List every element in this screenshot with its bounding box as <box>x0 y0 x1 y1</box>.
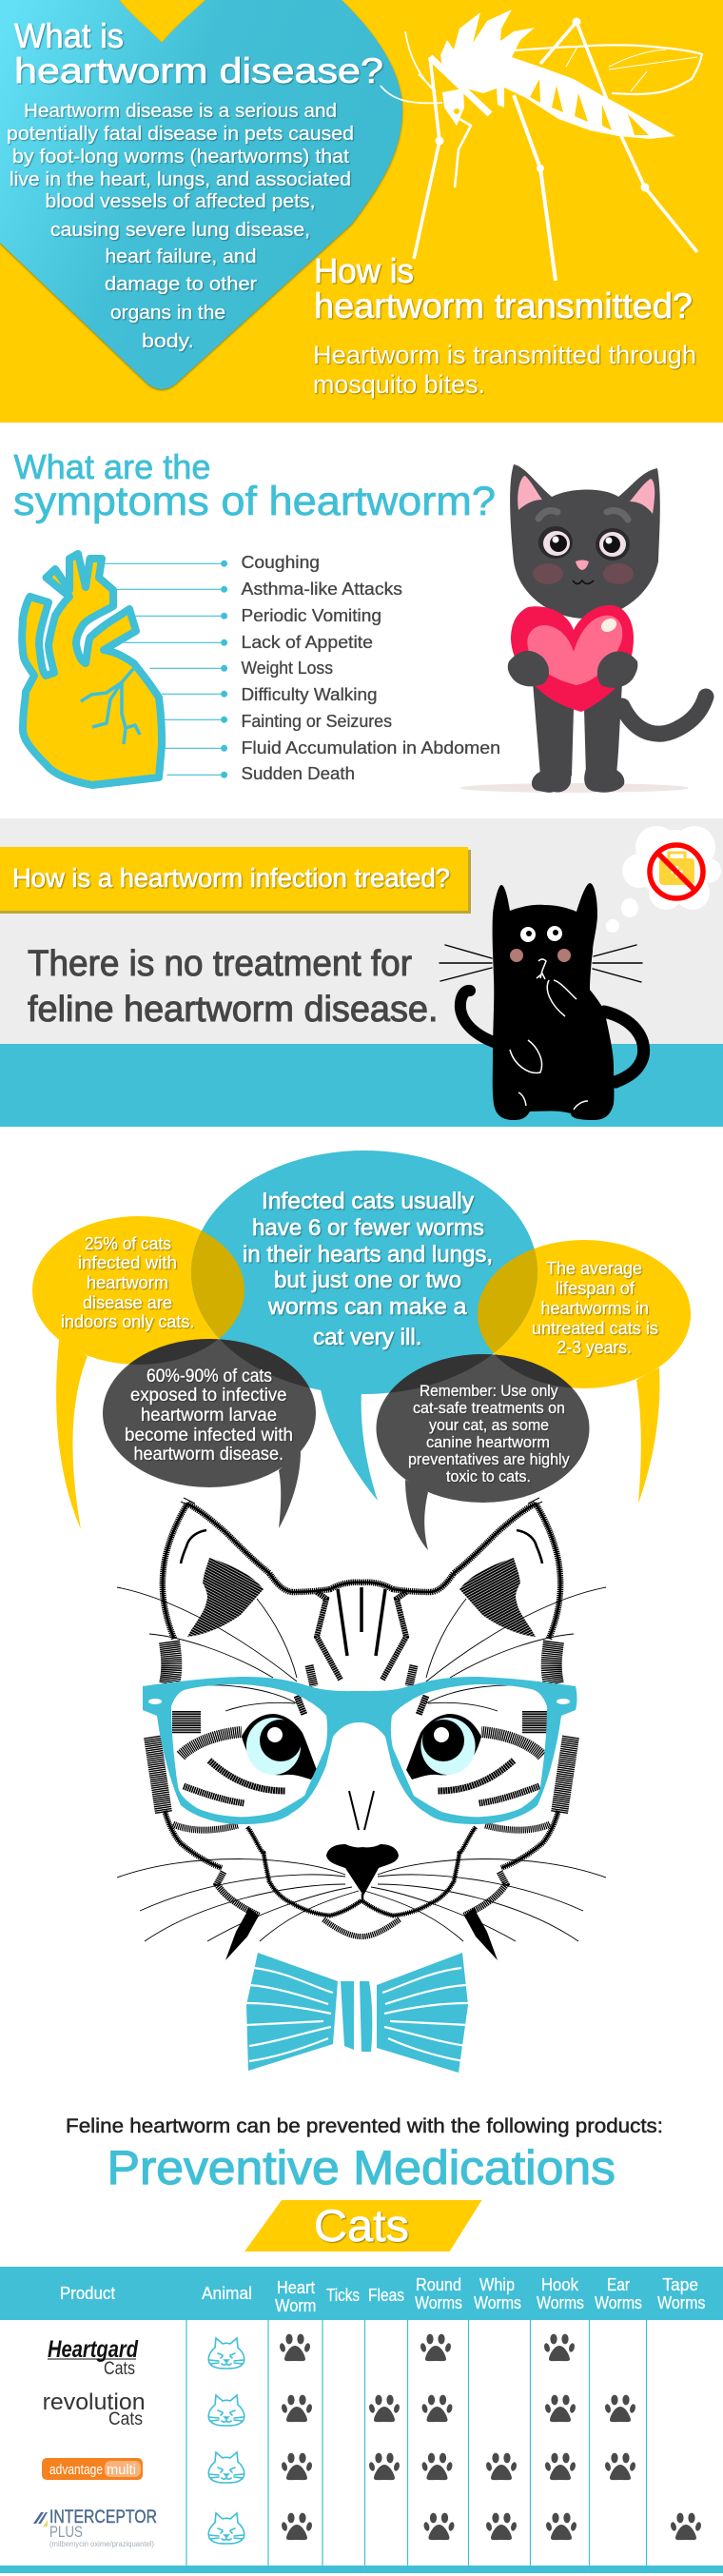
cat eye right <box>406 1714 481 1780</box>
logo: revolution <box>43 2389 146 2429</box>
logo: revolution: revolution <box>43 2389 146 2415</box>
list: symptoms with leader lines: Sudden Death <box>242 763 355 783</box>
table header labels: Whip <box>479 2274 515 2294</box>
text: transmission: mosquito bites. <box>313 370 485 399</box>
text: cyan bubble: worms can make a <box>267 1294 467 1320</box>
bubble: yellow left <box>32 1216 244 1529</box>
text: yellow left bubble: 25% of cats <box>85 1233 171 1253</box>
heading: symptoms: symptoms of heartworm? <box>13 479 496 524</box>
text: yellow left bubble: heartworm <box>87 1272 168 1292</box>
glasses <box>143 1677 576 1824</box>
heading: how is heartworm transmitted: How is <box>314 251 414 290</box>
text: dark right bubble: cat-safe treatments on <box>413 1399 565 1417</box>
icon: mosquito <box>381 10 702 281</box>
text: yellow left bubble <box>61 1233 194 1331</box>
text: cyan bubble: in their hearts and lungs, <box>243 1242 493 1268</box>
text: definition: heart failure, and <box>105 246 257 267</box>
logo: interceptor plus: (milbemycin oxime/praziquantel) <box>49 2540 154 2548</box>
text: definition: live in the heart, lungs, and associated <box>10 168 351 190</box>
list: symptoms with leader lines: Asthma-like Attacks <box>242 579 402 599</box>
heart shape <box>0 0 402 389</box>
icons: animal column <box>208 2338 244 2544</box>
text: cyan bubble <box>243 1189 493 1350</box>
panel: preventive medications <box>0 2114 723 2573</box>
table header labels: Worms <box>415 2292 462 2312</box>
bubble: cyan center <box>191 1150 537 1501</box>
illustration: heart <box>22 554 162 785</box>
cat eye left <box>242 1714 317 1780</box>
table header labels: Worms <box>537 2292 584 2312</box>
logo: advantage multi <box>42 2458 143 2480</box>
panel: treatment <box>0 818 723 1127</box>
list: symptoms with leader lines: Weight Loss <box>242 658 333 678</box>
illustration: thought bubble with no-medicine sign <box>606 826 721 933</box>
table header labels <box>60 2274 706 2315</box>
illustration: black cat <box>440 883 644 1120</box>
text: definition: by foot-long worms (heartworms) that <box>12 146 349 167</box>
heading: symptoms: What are the <box>13 447 211 486</box>
text: definition: Heartworm disease is a serious and <box>24 100 337 122</box>
table header labels: Worms <box>474 2292 521 2312</box>
text: dark right bubble: preventatives are highly <box>408 1450 570 1468</box>
text: yellow right bubble: The average <box>546 1258 642 1278</box>
heading: how is heartworm transmitted: heartworm transmitted? <box>314 286 693 325</box>
text: definition: body. <box>142 330 194 352</box>
text: yellow left bubble: infected with <box>78 1252 177 1272</box>
bow tie <box>246 1953 468 2073</box>
table header labels: Tape <box>662 2274 698 2294</box>
text: no treatment <box>28 944 438 1030</box>
text: definition <box>7 100 354 352</box>
list: symptoms with leader lines: Coughing <box>242 552 320 572</box>
bubble: yellow right <box>478 1240 691 1504</box>
heading: symptoms <box>13 447 496 524</box>
text: yellow right bubble: untreated cats is <box>532 1318 658 1338</box>
text: dark right bubble: toxic to cats. <box>446 1467 531 1485</box>
table header labels: Ear <box>607 2274 630 2294</box>
list: symptoms with leader lines: Lack of Appetite <box>242 632 373 652</box>
panel: speech bubbles <box>32 1150 691 1550</box>
table header labels: Animal <box>202 2283 252 2303</box>
icons: paw row advantage multi <box>281 2453 636 2480</box>
heading: what is heartworm disease: What is <box>14 16 124 55</box>
heading: what is heartworm disease: heartworm disease? <box>14 51 383 90</box>
text: yellow right bubble: heartworms in <box>540 1298 649 1318</box>
heading: how is heartworm transmitted <box>314 251 693 325</box>
logo: heartgard: Cats <box>104 2359 135 2379</box>
label: cats: Cats <box>314 2200 409 2251</box>
table header labels: Ticks <box>326 2285 360 2305</box>
list: symptoms with leader lines: Fluid Accumulation in Abdomen <box>242 737 500 757</box>
logo: heartgard <box>48 2336 139 2379</box>
logo: heartgard: Heartgard <box>48 2336 139 2363</box>
table header labels: Heart <box>277 2277 315 2297</box>
list: symptoms with leader lines: Periodic Vomiting <box>242 605 381 625</box>
logo: revolution: Cats <box>108 2409 143 2429</box>
table header labels: Worm <box>275 2295 316 2315</box>
text: no treatment: There is no treatment for <box>28 944 412 984</box>
cat face line art <box>117 1498 606 1960</box>
logo: interceptor plus: PLUS <box>49 2523 83 2541</box>
text: definition: organs in the <box>110 302 225 324</box>
bubble: dark right <box>377 1354 590 1550</box>
illustration: gray cat holding heart <box>460 464 706 793</box>
bubble: dark left <box>103 1339 316 1528</box>
banner: how is a heartworm infection treated <box>0 847 471 914</box>
icons: paw row revolution <box>281 2395 636 2422</box>
illustration: cat with glasses and bow tie <box>117 1498 606 2073</box>
text: dark left bubble: heartworm larvae <box>141 1406 277 1426</box>
text: definition: blood vessels of affected pets, <box>46 190 316 212</box>
list: symptoms with leader lines: Fainting or Seizures <box>242 711 392 731</box>
text: definition: causing severe lung disease, <box>50 219 310 241</box>
text: dark left bubble: become infected with <box>125 1426 293 1445</box>
logo: interceptor plus <box>33 2507 157 2548</box>
table header labels: Worms <box>595 2292 642 2312</box>
text: transmission: Heartworm is transmitted through <box>313 341 696 369</box>
text: dark left bubble: exposed to infective <box>130 1386 287 1406</box>
text: definition: potentially fatal disease in pets caused <box>7 123 354 145</box>
text: yellow left bubble: indoors only cats. <box>61 1311 194 1331</box>
icons: paw row heartgard <box>279 2334 576 2361</box>
text: dark left bubble <box>125 1367 293 1465</box>
table header labels: Round <box>416 2274 461 2294</box>
logo: advantage multi: multi <box>107 2462 136 2478</box>
text: no treatment: feline heartworm disease. <box>28 990 438 1030</box>
text: cyan bubble: have 6 or fewer worms <box>252 1215 484 1241</box>
list: symptoms with leader lines <box>103 552 500 783</box>
text: intro: Feline heartworm can be prevented with the following products: <box>66 2114 663 2137</box>
logo: advantage multi: advantage <box>49 2462 103 2478</box>
table <box>0 2267 723 2573</box>
text: definition: damage to other <box>105 273 257 295</box>
text: dark right bubble <box>408 1382 570 1485</box>
text: cyan bubble: but just one or two <box>274 1268 461 1293</box>
table header labels: Hook <box>541 2274 579 2294</box>
label: cats <box>244 2200 481 2252</box>
heading: what is heartworm disease <box>14 16 383 90</box>
text: transmission <box>313 341 696 399</box>
text: yellow right bubble <box>532 1258 658 1357</box>
text: dark right bubble: Remember: Use only <box>420 1382 558 1400</box>
table header labels: Worms <box>657 2292 706 2312</box>
text: cyan bubble: cat very ill. <box>313 1325 422 1350</box>
panel: what is heartworm <box>0 0 723 423</box>
text: dark left bubble: heartworm disease. <box>133 1445 283 1465</box>
text: dark right bubble: your cat, as some <box>429 1416 549 1434</box>
icons: paw row interceptor plus <box>281 2513 702 2540</box>
text: dark left bubble: 60%-90% of cats <box>147 1367 272 1386</box>
text: cyan bubble: Infected cats usually <box>262 1189 474 1214</box>
logo: interceptor plus: INTERCEPTOR <box>49 2507 157 2527</box>
text: yellow right bubble: 2-3 years. <box>557 1337 632 1357</box>
table header labels: Product <box>60 2283 115 2303</box>
panel: symptoms <box>13 447 706 793</box>
table header labels: Fleas <box>368 2285 404 2305</box>
heading: preventive medications: Preventive Medications <box>107 2141 616 2194</box>
text: yellow right bubble: lifespan of <box>556 1278 635 1298</box>
text: yellow left bubble: disease are <box>83 1292 172 1312</box>
banner: how is a heartworm infection treated: How is a heartworm infection treated? <box>12 863 450 893</box>
list: symptoms with leader lines: Difficulty Walking <box>242 684 377 704</box>
text: dark right bubble: canine heartworm <box>426 1433 550 1451</box>
